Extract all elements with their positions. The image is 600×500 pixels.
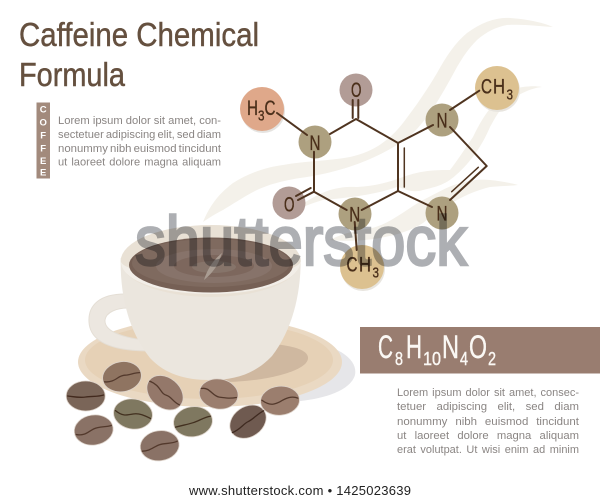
atom labels: N xyxy=(436,202,448,226)
atom labels: 3 xyxy=(506,86,513,104)
atom labels: C xyxy=(264,96,276,120)
top paragraph: ut laoreet dolore magna aliquam xyxy=(58,156,221,168)
bottom paragraph: tetuer adipiscing elit, sed diam xyxy=(397,401,579,413)
vertical coffee tag: O xyxy=(40,118,47,129)
saucer xyxy=(78,317,342,407)
top paragraph: Lorem ipsum dolor sit amet, con- xyxy=(58,115,221,127)
vertical coffee tag: F xyxy=(40,130,46,142)
saucer shadow xyxy=(290,340,355,402)
atom labels: O xyxy=(351,78,362,102)
formula banner: 2 xyxy=(488,349,496,369)
vertical coffee tag: F xyxy=(40,144,46,154)
bean xyxy=(66,381,105,411)
bottom paragraph: erat volutpat. Ut wisi enim ad minim xyxy=(397,444,579,456)
formula banner: H xyxy=(406,329,422,365)
bean xyxy=(172,404,214,439)
bean xyxy=(100,359,144,395)
formula banner: 10 xyxy=(423,349,441,369)
bottom paragraph: nonummy nibh euismod tincidunt xyxy=(397,416,579,428)
atom labels: N xyxy=(310,131,320,155)
title: Caffeine Chemical xyxy=(19,16,259,53)
atom labels: N xyxy=(436,108,448,132)
caffeine molecule xyxy=(240,66,520,291)
formula banner xyxy=(360,327,600,374)
vertical coffee tag: E xyxy=(40,156,46,167)
atom labels: C xyxy=(346,253,358,277)
formula banner: 4 xyxy=(460,349,468,369)
coffee surface xyxy=(129,238,293,292)
top paragraph: nonummy nibh euismod tincidunt xyxy=(58,143,221,155)
bean xyxy=(140,368,190,417)
bean xyxy=(197,376,240,412)
coffee cup xyxy=(89,225,301,380)
bottom paragraph: Lorem ipsum dolor sit amet, consec- xyxy=(397,387,579,399)
bottom paragraph: ut laoreet dolore magna aliquam xyxy=(397,430,579,442)
atom labels xyxy=(247,74,513,282)
vertical coffee tag: E xyxy=(40,168,46,178)
formula banner: O xyxy=(469,329,487,365)
bean xyxy=(72,412,115,448)
atom labels: O xyxy=(284,192,294,216)
watermark: shutterstock xyxy=(135,202,468,280)
formula banner: N xyxy=(442,329,459,365)
source url: www.shutterstock.com • 1425023639 xyxy=(188,483,411,498)
atom labels: H xyxy=(359,253,371,277)
cup handle xyxy=(89,294,150,351)
bean xyxy=(112,396,154,432)
atom circles xyxy=(240,66,520,291)
atom labels: 3 xyxy=(372,265,379,282)
bottom paragraph xyxy=(397,387,579,456)
bean xyxy=(223,398,273,445)
cup rim xyxy=(121,225,301,297)
top paragraph xyxy=(58,115,221,168)
bonds xyxy=(277,91,487,250)
formula banner: C xyxy=(378,329,393,365)
steam swirls xyxy=(203,18,553,241)
vertical coffee tag: C xyxy=(40,105,47,116)
atom labels: H xyxy=(493,74,505,98)
formula banner: 8 xyxy=(395,349,403,369)
atom labels: H xyxy=(247,96,258,120)
title: Formula xyxy=(19,56,126,93)
coffee beans xyxy=(66,359,301,463)
atom labels: C xyxy=(481,74,492,98)
cup body xyxy=(121,258,301,380)
vertical coffee tag xyxy=(36,102,50,178)
bean xyxy=(259,385,301,417)
title xyxy=(19,16,259,93)
atom labels: N xyxy=(349,203,360,227)
top paragraph: sectetuer adipiscing elit, sed diam xyxy=(58,129,221,141)
atom labels: 3 xyxy=(258,108,264,124)
bean xyxy=(138,428,181,463)
